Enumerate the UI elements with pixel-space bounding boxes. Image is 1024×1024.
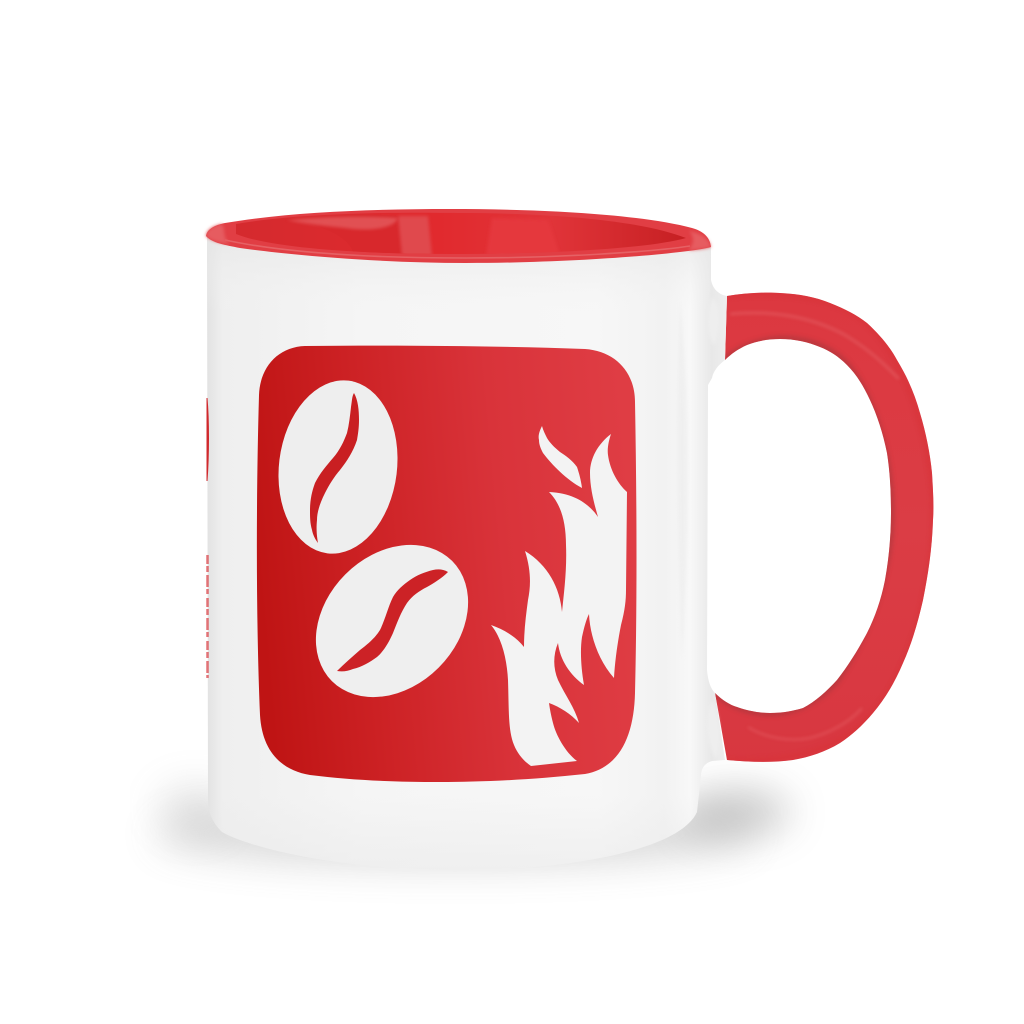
- icon: upper coffee bean: [269, 373, 407, 561]
- mug body: [207, 236, 727, 870]
- icon panel: [257, 346, 636, 782]
- icon: lower coffee bean: [285, 514, 499, 728]
- mug product illustration: [150, 209, 934, 880]
- icon: flames: [491, 426, 627, 766]
- handle: [715, 293, 933, 762]
- wraparound sliver of back design: [207, 398, 208, 678]
- rim and interior: [206, 209, 711, 263]
- ground shadow: [155, 786, 790, 864]
